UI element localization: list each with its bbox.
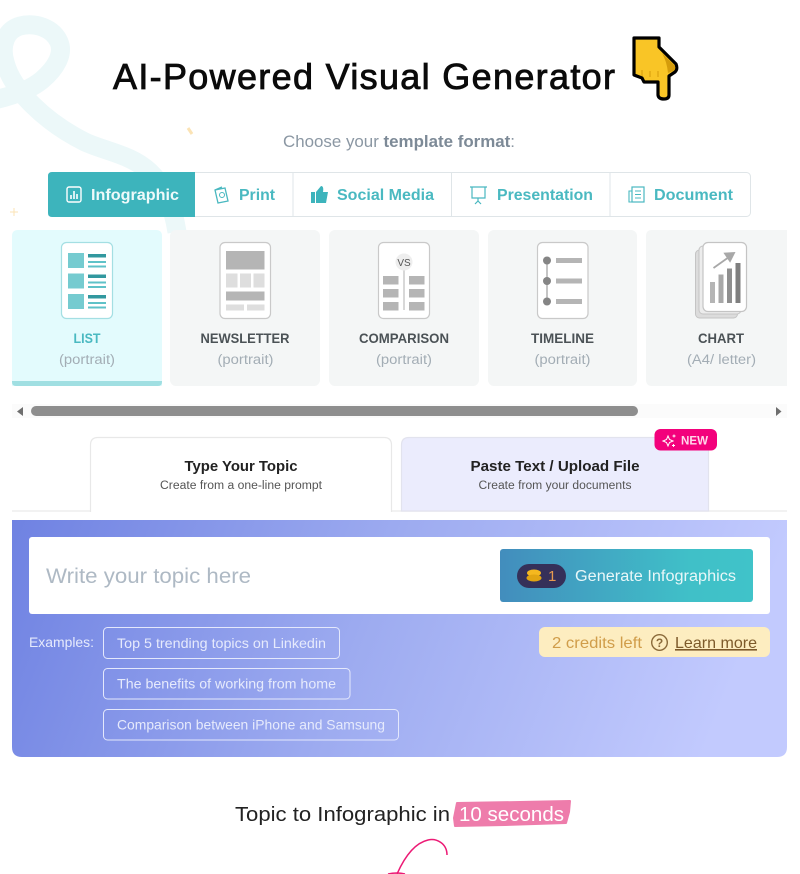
input mode divider line	[12, 510, 787, 512]
scrollbar	[12, 404, 787, 418]
example chip: LinkedIn	[104, 628, 340, 658]
arrow: pink curve	[388, 840, 447, 874]
example chip: working from home	[104, 668, 350, 699]
credits notice: Learn more	[675, 635, 757, 652]
background ribbon swirl	[0, 25, 192, 232]
credit cost pill	[517, 564, 566, 588]
credit cost pill: 1	[548, 568, 556, 585]
card: Newsletter	[170, 230, 320, 386]
card: Comparison	[329, 230, 479, 386]
card: Newsletter: (portrait)	[218, 352, 274, 367]
card: Chart: CHART	[698, 330, 744, 346]
card: Chart: (A4/ letter)	[687, 352, 756, 367]
tab: Presentation: Presentation	[497, 187, 593, 204]
title: AI-Powered Visual Generator	[113, 56, 615, 97]
example chip: iPhone and Samsung: Comparison between iPhone and Samsung	[117, 716, 385, 732]
tab: Type Your Topic: Create from a one-line prompt	[160, 480, 323, 492]
card: Chart	[646, 230, 787, 386]
card: Timeline: (portrait)	[534, 352, 590, 367]
icon: timeline template	[538, 242, 588, 318]
subtitle: choose template format: Choose your template format:	[283, 133, 515, 151]
highlight: 10 seconds: 10 seconds	[459, 804, 564, 826]
tab: Type Your Topic	[90, 438, 392, 512]
credits notice	[539, 627, 770, 657]
tab: Paste Text / Upload File	[402, 438, 708, 511]
card: List: LIST	[74, 330, 101, 346]
topic input field	[29, 537, 770, 614]
example chip: working from home: The benefits of working from home	[117, 676, 336, 692]
card: Comparison: COMPARISON	[359, 330, 449, 346]
card: Timeline	[488, 230, 637, 386]
panel: topic generator	[12, 520, 787, 757]
tab: Paste Text / Upload File: Create from your documents	[478, 480, 632, 492]
card: List	[12, 230, 162, 386]
tab: Infographic	[48, 172, 195, 217]
new badge: NEW	[681, 436, 708, 448]
icon: comparison template: VS	[397, 258, 411, 269]
card: Comparison: (portrait)	[376, 352, 432, 367]
example chip: LinkedIn: Top 5 trending topics on Linkedin	[117, 635, 326, 651]
format tab bar	[48, 172, 750, 217]
tab: Infographic: Infographic	[91, 187, 179, 204]
examples label: Examples:	[29, 634, 94, 650]
card: Timeline: TIMELINE	[531, 330, 594, 346]
tab: Type Your Topic: Type Your Topic	[184, 458, 298, 475]
example chip: iPhone and Samsung	[104, 710, 398, 740]
icon: list template	[62, 242, 112, 318]
generate button: Generate Infographics	[575, 568, 736, 585]
tab: Print: Print	[239, 187, 276, 204]
new badge	[654, 429, 717, 450]
card: Newsletter: NEWSLETTER	[200, 330, 290, 346]
icon: comparison template	[378, 242, 430, 318]
tab: Print	[215, 187, 276, 204]
topic input field: Write your topic here	[46, 565, 251, 588]
credits notice: ?	[656, 636, 663, 650]
tab: Document: Document	[654, 187, 734, 204]
tab: Social Media: Social Media	[337, 187, 434, 204]
card: List: (portrait)	[59, 352, 115, 367]
icon: pointing down hand	[634, 38, 677, 99]
icon: newsletter template	[220, 242, 270, 318]
tagline: topic to infographic	[235, 801, 570, 826]
tagline: topic to infographic: Topic to Infographic in	[235, 804, 450, 826]
tab: Paste Text / Upload File: Paste Text / Upload File	[470, 458, 640, 475]
generate button	[500, 549, 753, 602]
credits notice: 2 credits left	[552, 635, 643, 652]
icon: chart document stack	[696, 242, 746, 318]
